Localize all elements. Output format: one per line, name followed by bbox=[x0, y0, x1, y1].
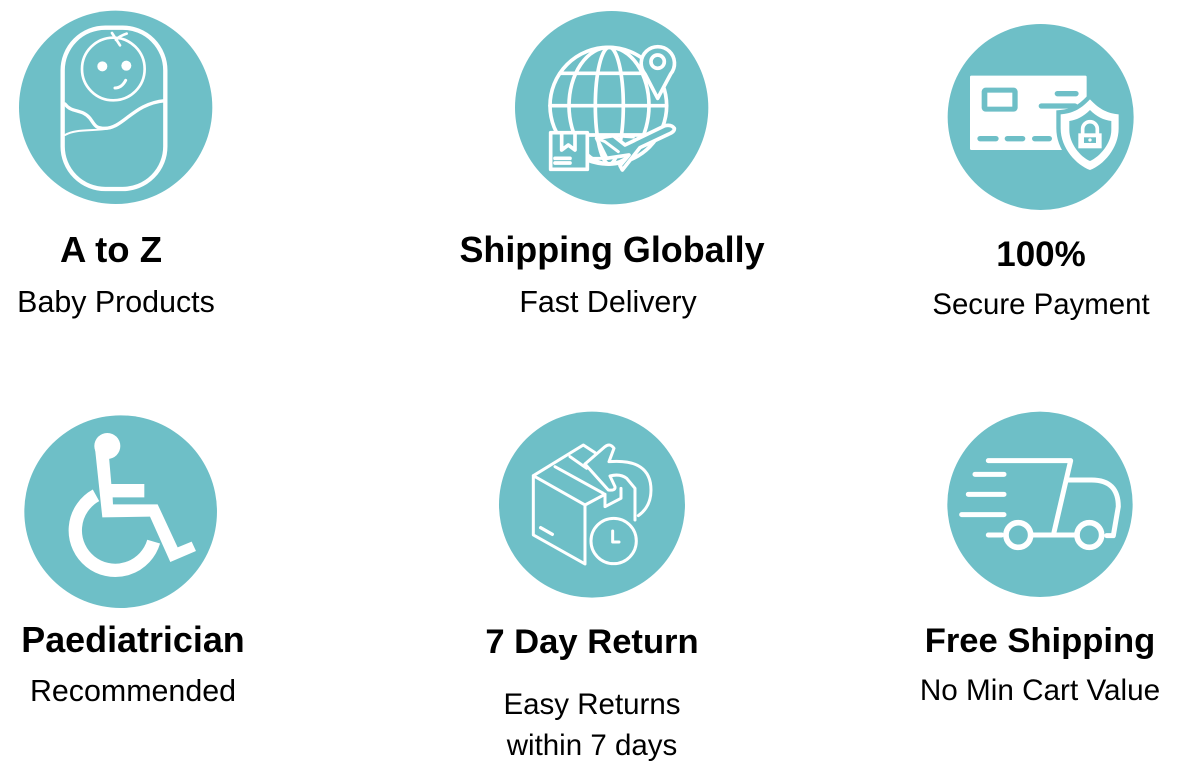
icon: fast delivery truck bbox=[947, 412, 1133, 597]
heading: Free Shipping: Free Shipping bbox=[925, 622, 1155, 660]
heading: A to Z: A to Z bbox=[60, 229, 162, 270]
text: Secure Payment: Secure Payment bbox=[932, 288, 1150, 321]
icon: swaddled baby bbox=[19, 11, 212, 204]
text: Recommended: Recommended bbox=[30, 674, 236, 708]
text: Easy Returns within 7 days: Easy Returns bbox=[503, 688, 681, 721]
heading: 100%: 100% bbox=[996, 235, 1086, 274]
icon: wheelchair symbol bbox=[24, 415, 217, 608]
text: Easy Returns within 7 days: within 7 days bbox=[506, 729, 677, 762]
heading: Shipping Globally: Shipping Globally bbox=[459, 230, 765, 270]
panel: A to Z Baby Products bbox=[17, 11, 215, 319]
heading: 7 Day Return: 7 Day Return bbox=[485, 623, 699, 661]
icon: credit card with shield bbox=[948, 24, 1134, 210]
text: No Min Cart Value: No Min Cart Value bbox=[920, 674, 1160, 707]
text: Baby Products: Baby Products bbox=[17, 285, 215, 319]
text: Easy Returns within 7 days bbox=[503, 688, 681, 762]
panel: Paediatrician Recommended bbox=[21, 415, 245, 708]
panel: 7 Day Return bbox=[485, 412, 699, 762]
panel: Shipping Globally bbox=[459, 11, 765, 319]
heading: Paediatrician: Paediatrician bbox=[21, 620, 245, 660]
panel: Free Shipping bbox=[920, 412, 1160, 707]
panel: 100% Secure Payment bbox=[932, 24, 1150, 321]
icon: globe with pin, box and plane bbox=[515, 11, 708, 204]
text: Fast Delivery: Fast Delivery bbox=[519, 285, 697, 319]
icon: box with return arrow and clock bbox=[499, 412, 685, 598]
